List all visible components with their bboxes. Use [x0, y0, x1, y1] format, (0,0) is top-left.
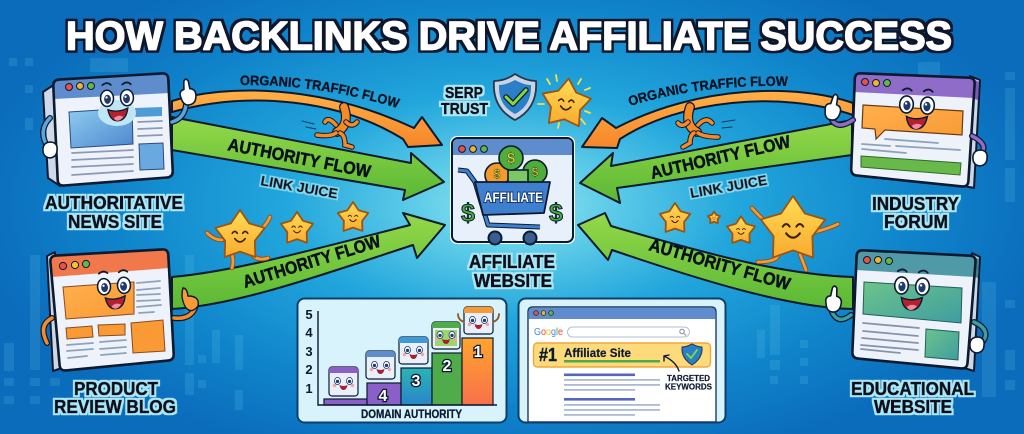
axis numbers: 4: [305, 325, 313, 340]
label: link juice right: LINK JUICE: [689, 172, 768, 201]
keyword label: [665, 374, 713, 392]
label: industry forum: INDUSTRY: [872, 194, 959, 214]
label: organic traffic flow left: ORGANIC TRAFFIC FLOW: [240, 75, 400, 108]
site: authoritative news site: [43, 73, 197, 186]
arrow: organic traffic flow right: [582, 91, 853, 148]
coin dollars: [494, 150, 539, 181]
arrow: authority flow bottom right: [578, 213, 853, 309]
icon: smiling star: [538, 75, 593, 128]
browser window: [528, 307, 716, 422]
label: product review blog: PRODUCT: [74, 379, 158, 399]
result title: Affiliate Site: [564, 346, 631, 360]
dollar signs: $: [549, 199, 563, 227]
dollar signs: [461, 199, 563, 227]
label: authority flow top right: AUTHORITY FLOW: [648, 131, 793, 183]
search box: [568, 327, 690, 337]
arrow: authority flow top left: [172, 117, 444, 200]
panel: domain authority chart: [298, 298, 506, 422]
stars right group: [660, 196, 838, 270]
axis numbers: [305, 307, 313, 396]
label: educational website: WEBSITE: [874, 397, 952, 417]
stars left group: [207, 202, 368, 268]
mini shield: [682, 344, 702, 365]
axes: [318, 311, 497, 405]
coin dollars: $: [507, 150, 516, 167]
arrow: authority flow top right: [580, 120, 852, 203]
bars: [324, 338, 493, 405]
coin dollars: $: [532, 165, 539, 179]
dollar signs: $: [461, 199, 475, 227]
bar numbers: [379, 344, 483, 405]
label: authoritative news site: [45, 193, 183, 232]
icon: trust shield: [494, 74, 536, 120]
result lines: [564, 374, 660, 416]
label: organic traffic flow right: ORGANIC TRAFFIC FLOW: [628, 76, 788, 106]
label: authority flow bottom right: AUTHORITY FLOW: [647, 235, 793, 294]
bar numbers: 2: [443, 358, 452, 375]
coins: [485, 146, 547, 187]
icon: running legs right: [678, 107, 735, 147]
axis numbers: 3: [305, 344, 313, 359]
label: educational website: EDUCATIONAL: [851, 379, 974, 399]
label: authority flow bottom left: AUTHORITY FLOW: [240, 231, 383, 292]
label: product review blog: [54, 379, 176, 417]
label: serp trust: [441, 85, 488, 118]
bar numbers: 1: [474, 344, 483, 361]
icon: running legs left: [302, 107, 357, 147]
keyword arrow: [664, 355, 679, 371]
top result highlight: [534, 343, 710, 367]
keyword label: TARGETED: [667, 374, 710, 383]
axis numbers: 5: [305, 307, 313, 322]
cart label: AFFILIATE: [484, 189, 543, 205]
label: affiliate website: [469, 252, 555, 291]
window dots: [534, 311, 553, 315]
title bar: [529, 308, 715, 319]
label: link juice left: LINK JUICE: [259, 172, 339, 201]
label: authoritative news site: AUTHORITATIVE: [45, 193, 183, 213]
label: affiliate website: WEBSITE: [474, 271, 552, 291]
site: industry forum: [823, 73, 987, 188]
title: HOW BACKLINKS DRIVE AFFILIATE SUCCESS: [66, 14, 952, 58]
axis numbers: 1: [305, 381, 313, 396]
label: industry forum: FORUM: [884, 212, 948, 232]
label: serp trust: TRUST: [441, 101, 488, 118]
keyword underline: [564, 360, 660, 362]
axis numbers: 2: [305, 362, 313, 377]
label: industry forum: [872, 194, 959, 232]
rank: #1: [539, 345, 557, 365]
label: authority flow top left: AUTHORITY FLOW: [226, 134, 373, 182]
site: educational website: [825, 250, 986, 371]
keyword label: KEYWORDS: [665, 382, 713, 392]
arrow: organic traffic flow left: [172, 90, 442, 147]
google logo: Google: [534, 326, 563, 338]
label: educational website: [851, 379, 974, 417]
basket: [458, 170, 550, 244]
label: serp trust: SERP: [445, 85, 483, 102]
arrow: authority flow bottom left: [172, 213, 445, 309]
label: affiliate website: AFFILIATE: [469, 252, 555, 272]
bar numbers: 4: [379, 388, 388, 405]
characters: [329, 307, 499, 396]
center: affiliate website window: [450, 136, 575, 244]
site: product review blog: [43, 249, 198, 371]
coin dollars: $: [494, 167, 501, 181]
label: authoritative news site: NEWS SITE: [68, 212, 162, 232]
chart caption: DOMAIN AUTHORITY: [361, 407, 462, 421]
bar numbers: 3: [412, 373, 421, 390]
panel: serp results: [518, 298, 726, 422]
label: product review blog: REVIEW BLOG: [54, 397, 176, 417]
